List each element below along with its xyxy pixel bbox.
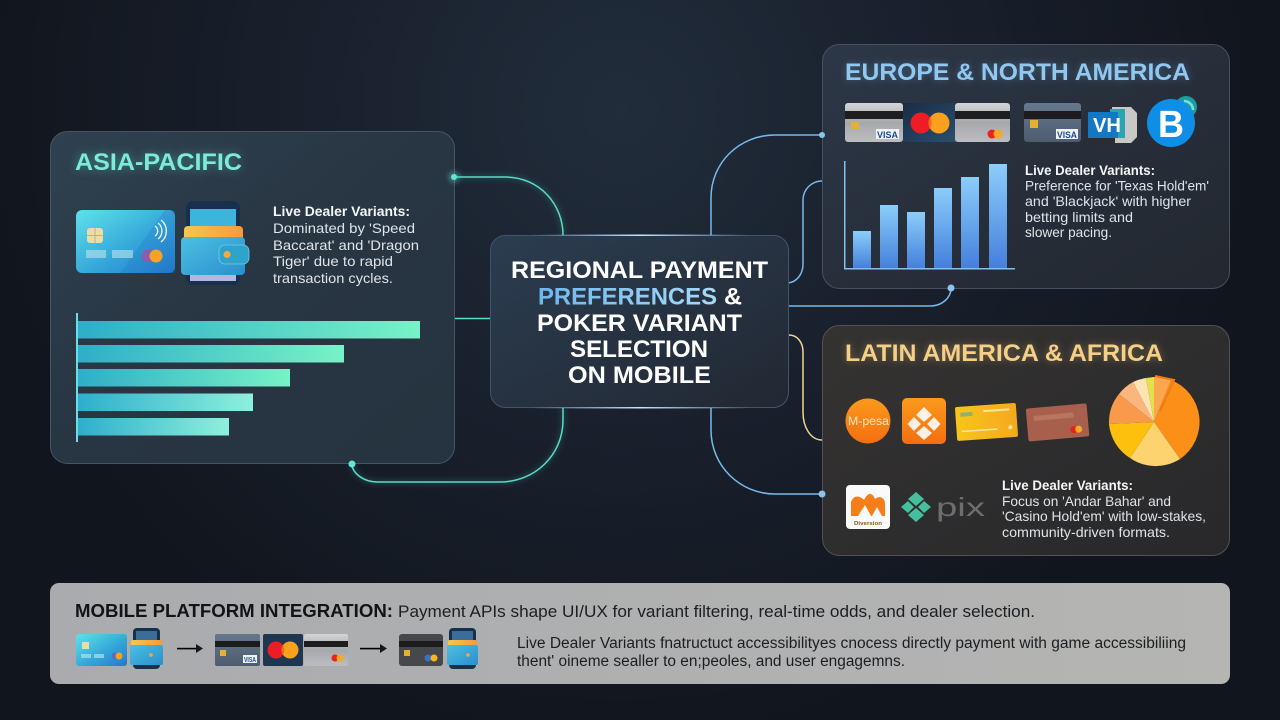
icon: copper card (1026, 403, 1089, 442)
arrow: step two (360, 644, 387, 653)
icon: silver card small (304, 634, 348, 666)
panel: Europe and North America (822, 44, 1230, 288)
connector: teal bottom to Asia-Pacific (352, 408, 563, 482)
panel: Latin America and Africa (822, 326, 1230, 556)
connector: blue lower to Europe (789, 288, 951, 306)
bar chart: Asia-Pacific (76, 313, 420, 442)
icon: slate Visa card (1024, 103, 1081, 142)
title: SELECTION (570, 336, 708, 363)
text: Europe live dealer variants: Preference for 'Texas Hold'em' (1025, 178, 1209, 194)
connector: blue to Latin America (711, 408, 822, 494)
text: Asia-Pacific live dealer variants: Tiger' due to rapid (273, 253, 393, 269)
text: Asia-Pacific live dealer variants: Live Dealer Variants: (273, 203, 410, 219)
icon: Pix logo (901, 492, 985, 522)
icon: silver Visa card (845, 103, 903, 142)
connector dot: Latin America (818, 490, 826, 498)
glow: bottom edge of central panel (530, 407, 750, 408)
icon: wallet and phone small, final (447, 628, 478, 669)
icon: wallet and phone small (130, 628, 163, 669)
connectors: central hub to regional panels (352, 135, 951, 494)
text: live dealer variants note (517, 635, 1186, 670)
icon: slate Visa card small (215, 634, 260, 666)
title: & (724, 284, 742, 310)
text: Latin America live dealer variants (1002, 477, 1206, 540)
title: PREFERENCES (538, 284, 717, 310)
text: Asia-Pacific live dealer variants: Dominated by 'Speed (273, 220, 415, 236)
icon: dark card small (399, 634, 443, 666)
icon: white tile with orange logo: Diversion (854, 521, 882, 527)
text: live dealer variants note: thent' oineme sealler to en;peoles, and user engagemns. (517, 653, 905, 670)
icon: silver card with Mastercard mark (955, 103, 1010, 142)
text: Latin America live dealer variants: community-driven formats. (1002, 524, 1170, 540)
connector: blue short to Europe (788, 181, 822, 283)
arrow: step one (177, 644, 203, 653)
heading: mobile platform integration: MOBILE PLATFORM INTEGRATION: (75, 601, 393, 621)
text: live dealer variants note: Live Dealer Variants fnatructuct accessibilityes cnocess directly payment with game accessibiliing (517, 635, 1186, 652)
text: Asia-Pacific live dealer variants: transaction cycles. (273, 270, 393, 286)
icon: VH payment logo: VH (1093, 115, 1121, 137)
glow: top edge of central panel (530, 234, 750, 236)
icon: VH payment logo (1088, 107, 1137, 143)
bar chart: Europe and North America (844, 161, 1015, 270)
icon: M-Pesa logo: M-pesa (848, 414, 889, 428)
icon: yellow card (955, 403, 1018, 441)
connector: gold to Latin America (789, 335, 822, 440)
icon: slate Visa card: VISA (1057, 130, 1077, 140)
icon: Mastercard tile (903, 103, 956, 142)
icon: Mastercard tile small (263, 634, 303, 666)
heading: Europe and North America: EUROPE & NORTH AMERICA (845, 59, 1190, 86)
icon: Pix logo: pix (936, 492, 985, 522)
text: Europe live dealer variants (1025, 162, 1209, 240)
pie chart: Latin America and Africa (1109, 376, 1200, 466)
icon: orange diamond app (902, 398, 946, 444)
text: Europe live dealer variants: and 'Blackjack' with higher (1025, 193, 1191, 209)
text: Europe live dealer variants: betting limits and (1025, 209, 1133, 225)
connector: teal middle to Asia-Pacific (455, 318, 490, 320)
heading: Latin America and Africa: LATIN AMERICA & AFRICA (845, 340, 1163, 367)
text: Asia-Pacific live dealer variants: Baccarat' and 'Dragon (273, 237, 419, 253)
connector dots: Europe (819, 132, 954, 292)
title: POKER VARIANT (537, 310, 742, 337)
connector: teal top to Asia-Pacific (454, 177, 563, 235)
icon: contactless card small (76, 634, 127, 666)
text: Latin America live dealer variants: Focus on 'Andar Bahar' and (1002, 493, 1171, 509)
icon: M-Pesa logo (846, 398, 890, 444)
text: Latin America live dealer variants: Live Dealer Variants: (1002, 477, 1133, 493)
text: Europe live dealer variants: Live Dealer Variants: (1025, 162, 1155, 178)
icon: B payment logo (1147, 96, 1197, 147)
icon: silver Visa card: VISA (877, 130, 898, 140)
connector: blue top to Europe (711, 135, 822, 235)
text: Latin America live dealer variants: 'Casino Hold'em' with low-stakes, (1002, 508, 1206, 524)
panel: central title (490, 234, 788, 408)
text: payment APIs summary: Payment APIs shape UI/UX for variant filtering, real-time odds, and dealer selection. (398, 602, 1035, 621)
panel: Asia-Pacific (50, 132, 454, 464)
icon: white tile with orange logo (846, 485, 890, 529)
icon: slate Visa card small: VISA (244, 657, 256, 664)
title: ON MOBILE (568, 362, 711, 389)
title: REGIONAL PAYMENT (511, 257, 768, 284)
icon: B payment logo: B (1158, 104, 1184, 146)
text: Europe live dealer variants: slower pacing. (1025, 224, 1112, 240)
icon: wallet and phone (181, 201, 249, 285)
panel: mobile platform integration (50, 583, 1230, 684)
icon: contactless card (76, 210, 175, 273)
heading: Asia-Pacific: ASIA-PACIFIC (75, 149, 242, 176)
text: Asia-Pacific live dealer variants (273, 203, 419, 286)
connector dots: Asia-Pacific (348, 171, 460, 468)
title (511, 257, 768, 389)
